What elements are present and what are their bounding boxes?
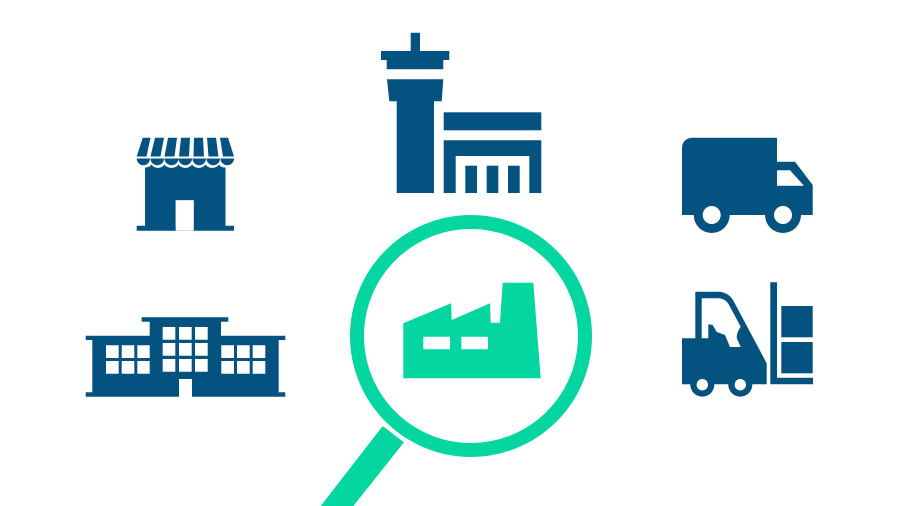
icon: magnifying glass — [321, 222, 585, 506]
icon: factory — [403, 283, 541, 378]
icon: forklift — [682, 282, 813, 397]
icon: delivery truck — [682, 138, 813, 233]
icon: storefront — [137, 138, 234, 231]
icon: office building — [86, 317, 285, 397]
icon: control tower and warehouse — [381, 33, 541, 193]
